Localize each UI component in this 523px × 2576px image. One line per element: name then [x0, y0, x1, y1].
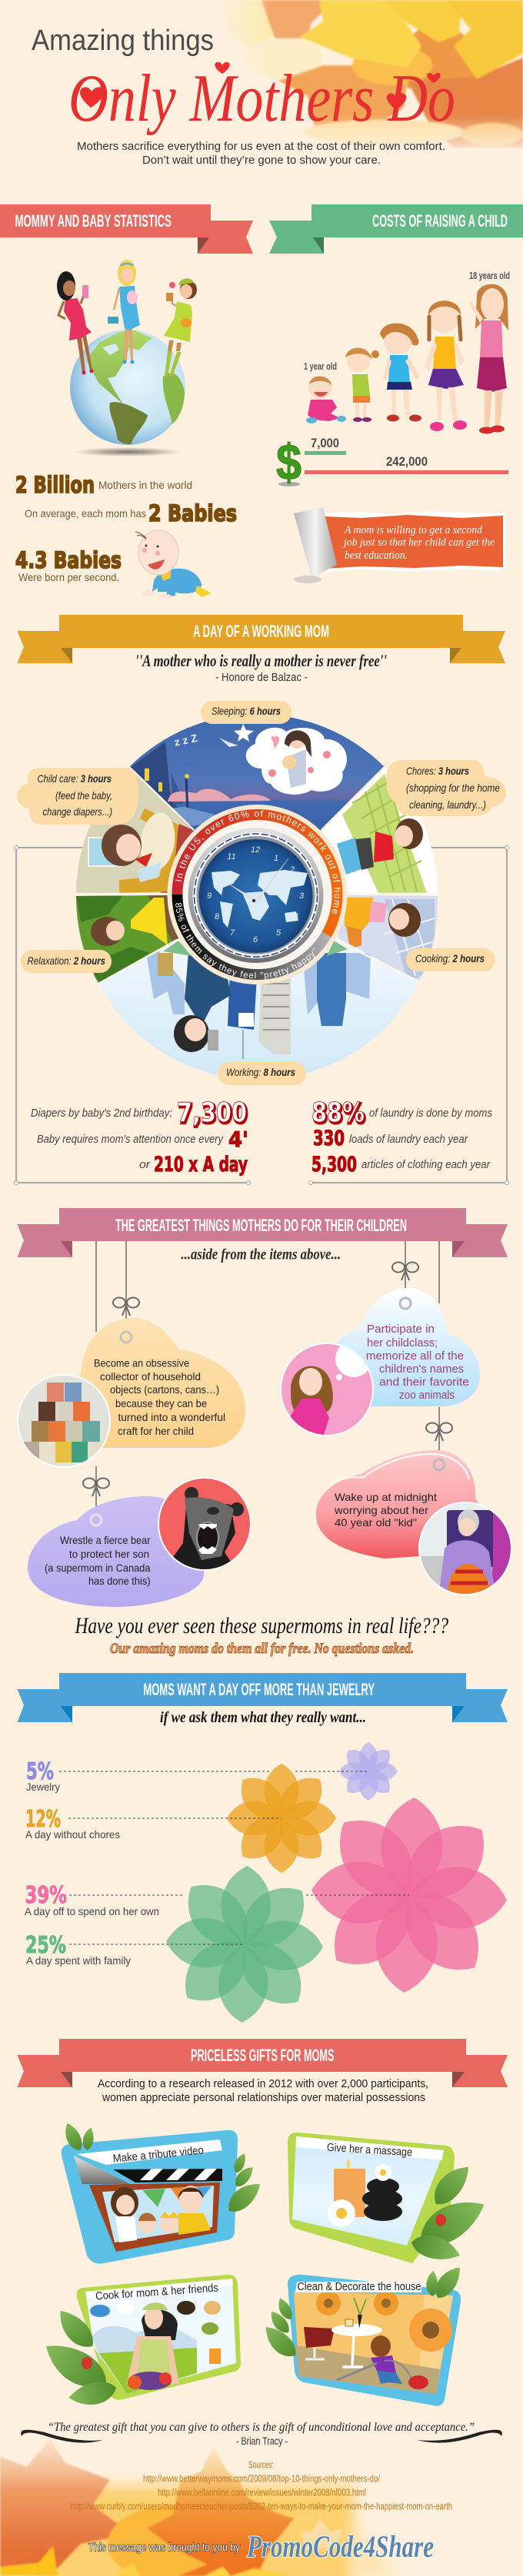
stat: 2 babies per mom: 2 Babies: [148, 500, 237, 526]
mom with black hair in red dress: [57, 271, 94, 375]
ribbon: greatest things mothers do: [17, 1208, 508, 1257]
girl with braids in yellow top: [425, 300, 467, 431]
coloured ring: bottom part: [172, 895, 331, 980]
label: sleeping: Sleeping: 6 hours: [212, 705, 281, 717]
clapper arm: [77, 2139, 222, 2165]
stat: 2 billion mothers: [15, 472, 192, 498]
stat: 5 percent jewelry: Jewelry: [26, 1781, 60, 1793]
stat: 25 percent with family: A day spent with family: [26, 1954, 131, 1967]
clock numbers: 9: [207, 891, 212, 901]
cloud: wrestle a bear: [28, 1476, 255, 1607]
cloud: wrestle a bear: has done this): [88, 1575, 151, 1587]
value 88 percent: 88%: [311, 1097, 365, 1128]
icon: crawling baby: [135, 530, 212, 599]
globe: [70, 330, 185, 445]
clock numbers: [207, 845, 305, 944]
clock numbers: 2: [289, 865, 295, 875]
cloud: participate in childclass: her childclass;: [367, 1336, 438, 1349]
clock numbers: 7: [230, 928, 235, 938]
card: tribute video: [61, 2120, 265, 2264]
cloud: participate in childclass: children's names: [379, 1363, 464, 1376]
header leaves background: [215, 0, 523, 161]
cloud: wrestle a bear: (a supermom in Canada: [45, 1562, 151, 1574]
subtitle: if we ask them: if we ask them what they really want...: [160, 1709, 366, 1726]
stats: baby care: [31, 1097, 248, 1177]
icon: green dollar sign: $: [276, 433, 301, 490]
stat: 2 babies per mom: [25, 500, 237, 526]
photo: grandmother knitting: [418, 1502, 512, 1595]
flower: 12 percent orange: [227, 1764, 336, 1873]
bow and ring: [113, 1297, 139, 1316]
card: tribute video: Make a tribute video: [112, 2144, 205, 2166]
chair and table: [304, 2327, 335, 2348]
star: [234, 724, 254, 742]
cloud: wrestle a bear: Wrestle a fierce bear: [60, 1534, 151, 1546]
white spokes between sectors: [76, 767, 438, 984]
green wedges under ring: [163, 941, 348, 956]
bow and ring: [392, 1262, 418, 1280]
intro text: Don’t wait until they’re gone to show your care.: [142, 154, 381, 167]
stats: laundry: [311, 1097, 492, 1177]
label: child care: [17, 768, 138, 825]
leaves and ladybug: [409, 2159, 491, 2266]
value 7,300: 7,300: [178, 1099, 248, 1130]
day wheel chart: [76, 718, 438, 1075]
cloud: household objects: collector of household: [100, 1370, 201, 1383]
mom with green hat and dress: [164, 278, 197, 377]
label: child care: (feed the baby,: [55, 789, 112, 802]
flowers: [328, 2164, 391, 2227]
woman with fruit: [142, 2310, 178, 2340]
decorative swashes: [21, 2430, 502, 2443]
stats: baby care: 4': [228, 1127, 248, 1152]
cream ring border: [168, 805, 348, 984]
cloud: participate in childclass: [277, 1262, 480, 1438]
bar 242,000: [305, 470, 508, 474]
sector: relaxation: [76, 895, 178, 984]
baby in pink: [306, 376, 346, 423]
quote: Balzac: - Honore de Balzac -: [215, 671, 308, 684]
callout: torn paper note: [294, 507, 505, 583]
clock numbers: 5: [276, 928, 281, 938]
quote: Balzac: [135, 651, 387, 684]
clock numbers: 10: [212, 871, 222, 880]
stat: 25 percent with family: 25%: [25, 1932, 66, 1959]
clock numbers: 3: [299, 891, 305, 901]
card: massage: [288, 2133, 491, 2266]
subtitle: aside from the items above: ...aside from the items above...: [182, 1247, 341, 1263]
continents: [86, 330, 185, 444]
card: clean and decorate: Clean & Decorate the house: [297, 2281, 421, 2293]
clock hands: [228, 858, 288, 903]
stats: baby care: 210 x A day: [154, 1153, 248, 1177]
label: chores: (shopping for the home: [406, 782, 500, 794]
globe shadow: [74, 447, 182, 456]
stat: 12 percent without chores: [25, 1806, 120, 1841]
hanging strings: [96, 1241, 439, 1520]
research note: According to a research released in 2012 with over 2,000 participants,: [98, 2077, 428, 2090]
ribbon: mommy and baby statistics: MOMMY AND BABY STATISTICS: [15, 211, 172, 231]
globe with three moms: [57, 260, 197, 456]
stat: 2 billion mothers: Mothers in the world: [98, 479, 192, 491]
cloud: wrestle a bear: to protect her son: [69, 1548, 149, 1560]
label: [295, 2282, 421, 2292]
clock numbers: 8: [215, 912, 220, 921]
photo: thinking girl: [277, 1340, 377, 1438]
closing quote: - Brian Tracy -: [236, 2435, 288, 2447]
wooden frame and party scene: [89, 2183, 220, 2252]
stats: baby care: Diapers by baby's 2nd birthday:: [31, 1107, 172, 1120]
cloud: participate in childclass: and their favorite: [379, 1376, 469, 1389]
intro text: Mothers sacrifice everything for us even at the cost of their own comfort.: [77, 141, 445, 153]
title line: Amazing things: Amazing things: [32, 25, 214, 57]
hearts on title: [80, 62, 441, 110]
sources: http://www.bellaonline.com/review/issues/winter2008/nf003.html: [158, 2487, 366, 2498]
boy with vacuum: [371, 2335, 391, 2357]
kitchen icons: [90, 2305, 110, 2317]
coloured ring: top part: [172, 809, 342, 938]
footer leaves background: [0, 2438, 400, 2576]
label: relaxation: [21, 950, 112, 973]
stats: baby care: or: [139, 1158, 151, 1171]
closing quote: “The greatest gift that you can give to others is the gift of unconditional love and acceptance.”: [48, 2421, 475, 2434]
decorative frame lines: [16, 848, 507, 1183]
ribbon: priceless gifts for moms: [17, 2039, 508, 2087]
cloud: participate in childclass: zoo animals: [399, 1389, 455, 1402]
cloud: wake up at midnight: 40 year old "kid": [335, 1516, 417, 1529]
callout: torn paper note: best education.: [345, 549, 408, 562]
label: sleeping: [201, 701, 291, 724]
cloud: household objects: because they can be: [115, 1397, 207, 1409]
cloud with mom and baby: [246, 728, 347, 795]
label: working: [218, 1062, 306, 1085]
stat: 2 babies per mom: On average, each mom has: [25, 507, 146, 520]
closing quote: [48, 2421, 475, 2447]
dashed leader lines: [59, 1771, 409, 1944]
stat: 5 percent jewelry: 5%: [26, 1758, 54, 1785]
cloud: wake up at midnight: Wake up at midnight: [335, 1491, 437, 1503]
label: 1 year old: 1 year old: [304, 360, 337, 372]
sector: chores: [323, 767, 438, 893]
stats: laundry: 5,300: [311, 1153, 357, 1177]
research note: women appreciate personal relationships over material possessions: [102, 2091, 425, 2104]
label: cooking: [406, 948, 495, 971]
stat: 25 percent with family: [25, 1932, 131, 1967]
flower: 5 percent purple: [339, 1742, 398, 1801]
stats: laundry: articles of clothing each year: [361, 1158, 491, 1171]
callout: torn paper note: A mom is willing to get a second: [344, 524, 483, 536]
value 7,000: 7,000: [311, 436, 339, 450]
cloud: household objects: [15, 1297, 245, 1468]
clapper stripes: [113, 2169, 222, 2183]
card: cook for friends: [37, 2275, 241, 2409]
sources: Sources:: [248, 2459, 274, 2470]
stats: laundry: of laundry is done by moms: [369, 1107, 492, 1120]
callout: torn paper note: job just so that her child can get the: [342, 536, 495, 549]
candle: [334, 2169, 365, 2217]
leaves: [61, 2120, 265, 2217]
sources: http://www.betterwaymoms.com/2009/08/top-10-things-only-mothers-do/: [143, 2473, 380, 2484]
stat: 4.3 babies per second: Were born per second.: [18, 571, 119, 583]
ribbon: mommy and baby statistics: [0, 204, 253, 254]
label: working: Working: 8 hours: [226, 1066, 295, 1078]
cloud: wake up at midnight: worrying about her: [334, 1504, 428, 1516]
bar 7,000: [305, 451, 346, 455]
leaves and ladybug: [37, 2305, 118, 2409]
stats: baby care: Baby requires mom's attention once every: [37, 1133, 224, 1146]
cloud: household objects: craft for her child: [118, 1425, 194, 1437]
stat: 39 percent on her own: [25, 1882, 159, 1917]
card body: [62, 2130, 238, 2264]
clock: [183, 820, 332, 969]
stones: [362, 2178, 402, 2221]
bow and ring: [426, 1423, 452, 1441]
clock numbers: 1: [274, 854, 278, 863]
photo: roaring bear: [158, 1477, 252, 1571]
leaves: [259, 2262, 466, 2362]
stat: 12 percent without chores: A day without chores: [25, 1828, 120, 1841]
cloud: wake up at midnight: [316, 1423, 515, 1598]
cloud: household objects: Become an obsessive: [94, 1357, 189, 1369]
stat: 39 percent on her own: 39%: [25, 1882, 67, 1909]
world map: [212, 870, 308, 928]
label: chores: [386, 760, 506, 816]
bow and ring: [83, 1479, 109, 1496]
stat: 39 percent on her own: A day off to spend on her own: [25, 1905, 159, 1917]
toddler in green: [345, 348, 379, 422]
stat: 5 percent jewelry: [26, 1758, 60, 1793]
sector: cooking: [338, 895, 438, 981]
flower: 25 percent green: [165, 1865, 324, 2023]
ring text top: In the US, over 60% of mothers work out of home: [175, 810, 341, 914]
ribbon: costs of raising a child: [269, 204, 523, 254]
label: cooking: Cooking: 2 hours: [415, 952, 485, 964]
ribbon: priceless gifts for moms: PRICELESS GIFTS FOR MOMS: [191, 2046, 334, 2065]
quote: Balzac: ''A mother who is really a mother is never free'': [135, 651, 387, 670]
growth from baby to 18 year old: [304, 270, 510, 433]
stats: laundry: 330: [313, 1127, 345, 1150]
mother in pink top: [469, 284, 508, 433]
clock numbers: 12: [251, 845, 260, 855]
bar chart: cost 7,000 vs 242,000: [305, 436, 508, 474]
research note: [98, 2077, 428, 2104]
value 88 percent: 88%: [312, 1099, 366, 1130]
child in blue tank top: [380, 324, 421, 421]
photo: stacked cans: [15, 1374, 112, 1468]
sector: sleeping: [129, 718, 385, 832]
stat: 2 billion mothers: 2 Billion: [15, 472, 95, 498]
label: child care: change diapers...): [43, 805, 112, 818]
intro text: [77, 141, 445, 167]
stats: laundry: loads of laundry each year: [349, 1133, 468, 1146]
ring text bottom: 85% of them say they feel "pretty happy": [175, 903, 315, 981]
sector: sleeping: z z Z: [173, 732, 199, 749]
ribbon: moms want a day off: [17, 1673, 508, 1722]
card: clean and decorate: [259, 2262, 466, 2406]
title: [32, 25, 455, 136]
flower: 39 percent pink: [310, 1796, 508, 1994]
subheading: our amazing moms: Our amazing moms do them all for free. No questions asked.: [110, 1641, 414, 1657]
stat: 12 percent without chores: 12%: [25, 1806, 61, 1833]
label: chores: cleaning, laundry...): [409, 798, 486, 811]
credit line: [88, 2529, 434, 2564]
cloud: household objects: turned into a wonderful: [118, 1411, 225, 1423]
sector: working: [98, 938, 418, 1075]
ribbon: a day of a working mom: A DAY OF A WORKING MOM: [193, 622, 329, 641]
clock numbers: 11: [227, 852, 236, 861]
value 242,000: 242,000: [386, 454, 428, 469]
label: child care: Child care: 3 hours: [37, 772, 112, 785]
logo: PromoCode4Share: PromoCode4Share: [246, 2529, 434, 2564]
stat: 4.3 babies per second: [15, 547, 122, 583]
value 7,300: 7,300: [177, 1097, 247, 1128]
label: chores: Chores: 3 hours: [406, 765, 469, 777]
sector: child care: [76, 767, 194, 893]
sources: [71, 2459, 452, 2511]
cloud: participate in childclass: memorize all of the: [366, 1349, 464, 1363]
card: cook for friends: Cook for mom & her friends: [95, 2282, 218, 2303]
cloud: household objects: objects (cartons, cans…): [110, 1383, 219, 1396]
clock numbers: 4: [294, 912, 298, 921]
card: massage: Give her a massage: [327, 2142, 412, 2159]
stat: 4.3 babies per second: 4.3 Babies: [15, 547, 122, 573]
credit line: This message was brought to you by: [88, 2542, 241, 2554]
ribbon: a day of a working mom: [17, 615, 505, 663]
blonde mom in blue dress: [108, 260, 140, 364]
cloud: participate in childclass: Participate in: [367, 1323, 435, 1336]
label: relaxation: Relaxation: 2 hours: [28, 954, 105, 967]
clock numbers: 6: [253, 935, 258, 944]
